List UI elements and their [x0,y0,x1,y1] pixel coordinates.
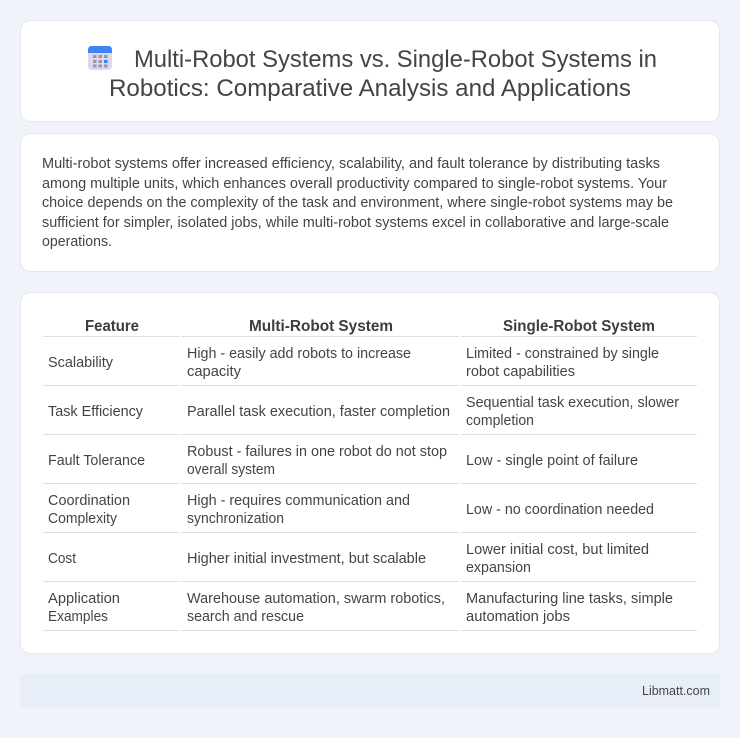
row: cost: Higher initial investment, but scalable [187,551,426,567]
text block: summary paragraph: Multi-robot systems offer increased efficiency, scalability, and fault tolerance by distributing tasks [42,156,660,172]
title: Multi-Robot Systems vs. Single-Robot Systems in [134,46,657,73]
text block: summary paragraph: operations. [42,234,112,250]
row: task efficiency: Sequential task execution, slower [466,395,679,411]
row: scalability: robot capabilities [466,364,575,380]
table header: Feature [85,318,139,335]
row: cost [48,542,649,576]
title: Robotics: Comparative Analysis and Applications [109,75,631,102]
row: fault tolerance: Low - single point of failure [466,453,638,469]
row: scalability: Scalability [48,355,114,371]
title [109,46,657,102]
row: coordination complexity: Complexity [48,511,118,527]
table header: Multi-Robot System [249,318,393,335]
text block: summary paragraph: among multiple units, which enhances overall productivity compared to single-robot systems. Your [42,176,667,192]
row: coordination complexity [48,493,654,527]
row: application examples: Warehouse automation, swarm robotics, [187,591,445,607]
text block: summary paragraph: choice depends on the complexity of the task and environment, where single-robot systems may be [42,195,673,211]
table header [85,318,655,335]
text block: summary paragraph [42,156,673,250]
footer [20,674,720,708]
row: coordination complexity: synchronization [187,511,284,527]
row: application examples: search and rescue [187,609,304,625]
row: coordination complexity: High - requires communication and [187,493,410,509]
row: fault tolerance: Fault Tolerance [48,453,145,469]
row: cost: Lower initial cost, but limited [466,542,649,558]
row: scalability [48,346,659,380]
panel: title card [20,20,720,122]
row: task efficiency [48,395,679,429]
row: cost: expansion [466,560,531,576]
row: task efficiency: Task Efficiency [48,404,144,420]
row: coordination complexity: Low - no coordination needed [466,502,654,518]
table header: Single-Robot System [503,318,655,335]
row: application examples: automation jobs [466,609,570,625]
row: scalability: Limited - constrained by single [466,346,659,362]
row: cost: Cost [48,551,76,567]
row: task efficiency: completion [466,413,534,429]
row: application examples: Manufacturing line tasks, simple [466,591,673,607]
row: scalability: capacity [187,364,242,380]
row: task efficiency: Parallel task execution, faster completion [187,404,450,420]
row: application examples: Examples [48,609,108,625]
icon: calendar grid [88,46,112,70]
panel: summary [20,134,720,272]
row: fault tolerance: Robust - failures in one robot do not stop [187,444,447,460]
row: fault tolerance [48,444,638,478]
panel: comparison table [20,292,720,654]
footer: Libmatt.com [642,684,710,698]
row: scalability: High - easily add robots to increase [187,346,411,362]
row: coordination complexity: Coordination [48,493,130,509]
row: application examples: Application [48,591,120,607]
text block: summary paragraph: sufficient for simpler, isolated jobs, while multi-robot systems excel in collaborative and large-scale [42,215,669,231]
row: application examples [48,591,673,625]
row: fault tolerance: overall system [187,462,275,478]
